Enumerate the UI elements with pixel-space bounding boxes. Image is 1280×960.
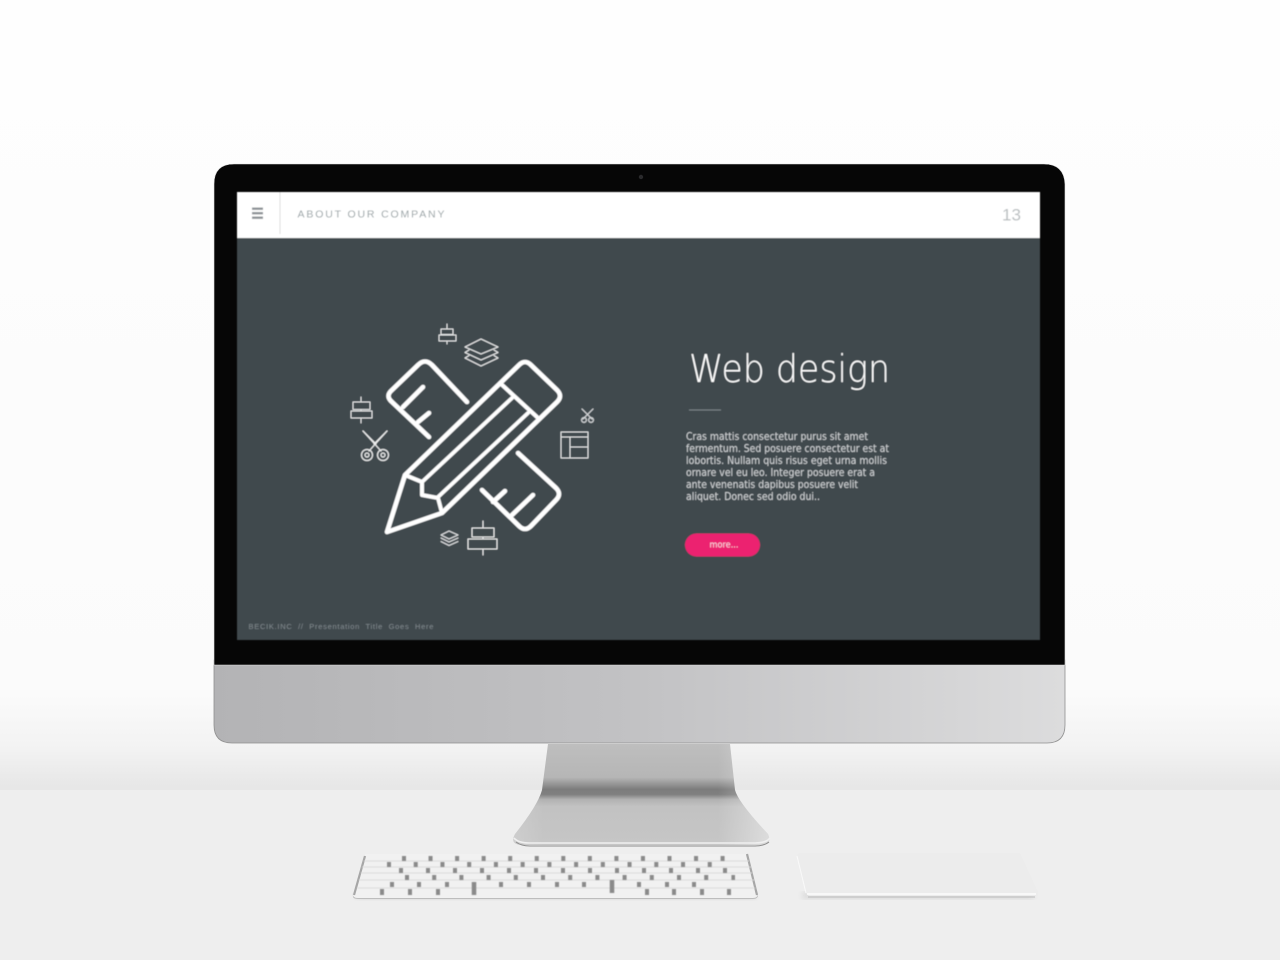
body text	[686, 431, 889, 503]
monitor chin	[214, 660, 1065, 743]
monitor bezel	[214, 164, 1065, 665]
icon: pencil	[387, 362, 560, 532]
body text: aliquet. Donec sed odio dui..	[686, 491, 820, 503]
body text: ante venenatis dapibus posuere velit	[686, 479, 858, 491]
icon: menu	[252, 208, 263, 219]
slide background	[237, 238, 1040, 640]
icon: align top	[439, 324, 456, 344]
icon: scissors right	[582, 409, 593, 422]
heading: Web design	[689, 347, 890, 391]
background: desk	[0, 790, 1280, 960]
body text: fermentum. Sed posuere consectetur est at	[686, 443, 889, 455]
icon: layout	[561, 432, 588, 458]
button: more	[685, 534, 760, 556]
body text: ornare vel eu leo. Integer posuere erat a	[686, 467, 875, 479]
icon: align left	[351, 397, 372, 423]
body text: lobortis. Nullam quis risus eget urna mollis	[686, 455, 887, 467]
illustration: pencil and ruler	[351, 324, 593, 555]
heading rule	[689, 410, 721, 411]
icon: scissors left	[362, 431, 388, 460]
slide header bar	[237, 192, 1040, 238]
icon: layers top	[465, 339, 498, 366]
screen	[237, 192, 1040, 640]
webcam	[639, 175, 643, 179]
button: more: more...	[710, 540, 738, 550]
keyboard	[353, 854, 758, 900]
icon: ruler bottom-right	[482, 453, 559, 529]
trackpad	[797, 853, 1038, 899]
monitor	[214, 164, 1065, 846]
body text: Cras mattis consectetur purus sit amet	[686, 431, 868, 443]
stand	[513, 744, 770, 846]
footer text: BECIK.INC // Presentation Title Goes Here	[248, 622, 434, 631]
icon: layers bottom	[441, 531, 458, 546]
header title: ABOUT OUR COMPANY	[298, 208, 444, 220]
page number: 13	[1002, 206, 1021, 224]
icon: ruler top-left	[388, 362, 467, 437]
icon: align bottom	[468, 521, 497, 555]
